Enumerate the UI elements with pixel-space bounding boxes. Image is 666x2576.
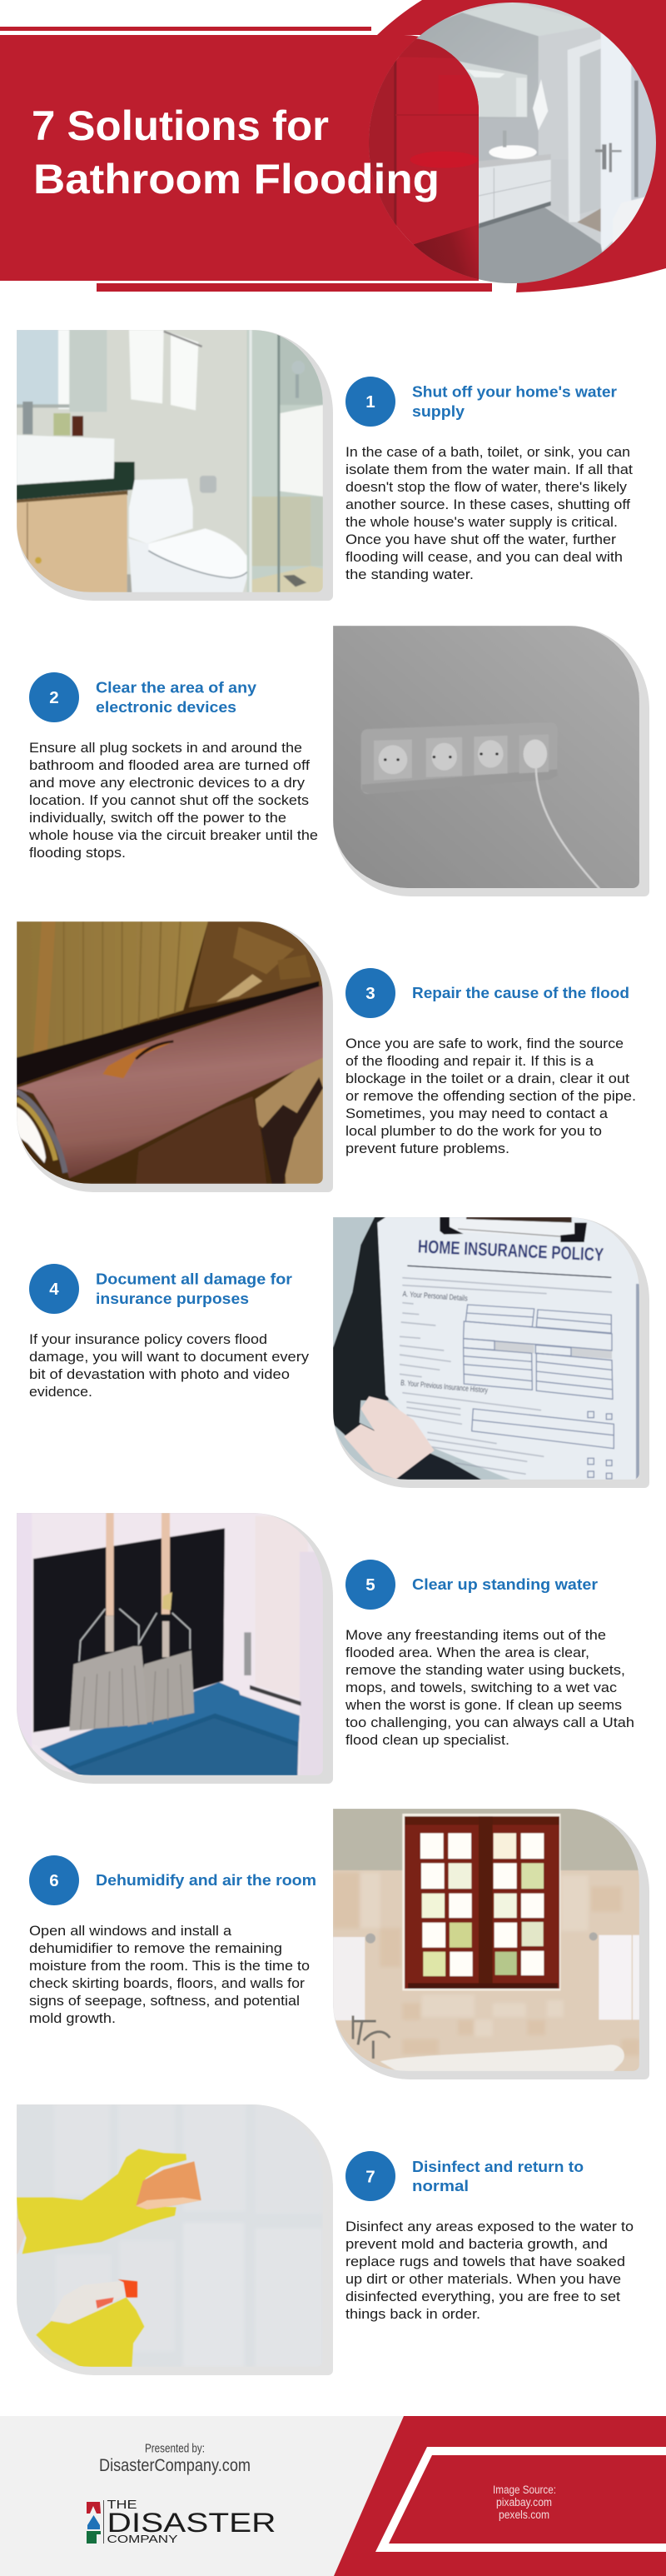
body text	[345, 445, 633, 582]
logo: COMPANY	[107, 2534, 178, 2545]
body text: mops, and towels, switching to a wet vac	[345, 1680, 617, 1695]
heading: electronic devices	[96, 698, 236, 716]
heading	[412, 2158, 584, 2194]
image source: pixabay.com	[496, 2496, 552, 2509]
photo: home insurance policy form: HOME INSURANCE POLICY	[417, 1236, 604, 1265]
body text: disinfected everything, you are free to set	[345, 2289, 620, 2304]
body text: If your insurance policy covers flood	[29, 1332, 267, 1347]
body text: check skirting boards, floors, and walls for	[29, 1976, 306, 1991]
number badge: 4	[49, 1280, 59, 1299]
logo	[87, 2498, 276, 2545]
photo backing	[17, 921, 333, 1192]
red tinted left side of the photo	[369, 38, 479, 280]
body text: remove the standing water using buckets,	[345, 1663, 625, 1678]
heading: Shut off your home's water	[412, 383, 617, 400]
body text: flood clean up specialist.	[345, 1733, 509, 1748]
presented by: DisasterCompany.com	[99, 2456, 251, 2475]
body text: isolate them from the water main. If all that	[345, 462, 633, 477]
heading: Document all damage for	[96, 1270, 292, 1288]
presented by: Presented by:	[145, 2441, 205, 2456]
body text: when the worst is gone. If clean up seems	[345, 1698, 622, 1713]
photo: home insurance policy form	[333, 1217, 639, 1480]
heading: Clear the area of any	[96, 678, 257, 696]
number badge	[29, 1855, 79, 1905]
title: Bathroom Flooding	[33, 156, 440, 202]
hero photo: bathroom	[358, 0, 666, 289]
body text: too challenging, you can always call a Utah	[345, 1715, 634, 1730]
heading: normal	[412, 2177, 469, 2194]
icon: flame	[87, 2502, 101, 2514]
red backdrop shape	[377, 0, 666, 292]
photo: bathroom with toilet and sink	[17, 330, 323, 592]
body text: of the flooding and repair it. If this is a	[345, 1054, 594, 1069]
bottom stripe	[97, 283, 492, 292]
photo: home insurance policy form: B. Your Previous Insurance History	[400, 1379, 489, 1395]
body text: prevent future problems.	[345, 1141, 509, 1156]
heading: Repair the cause of the flood	[412, 984, 629, 1001]
photo: damaged copper pipe	[17, 921, 323, 1184]
body text: blockage in the toilet or a drain, clear it out	[345, 1071, 629, 1086]
body text	[345, 1036, 636, 1156]
body text: Disinfect any areas exposed to the water to	[345, 2219, 634, 2234]
photo: home insurance policy form: A. Your Personal Details	[402, 1290, 468, 1302]
body text: or remove the offending section of the pipe.	[345, 1089, 636, 1104]
number badge	[345, 2151, 395, 2201]
number badge	[345, 377, 395, 427]
section 1: shut off water	[17, 330, 633, 601]
heading	[412, 383, 617, 420]
number badge: 6	[49, 1871, 59, 1890]
number badge	[29, 672, 79, 722]
body text: individually, switch off the power to the	[29, 811, 286, 826]
number badge: 5	[365, 1575, 375, 1595]
image source	[493, 2484, 556, 2521]
body text: Move any freestanding items out of the	[345, 1628, 606, 1643]
red corner panel	[334, 2416, 666, 2576]
body text: signs of seepage, softness, and potential	[29, 1994, 300, 2009]
body text: another source. In these cases, shutting off	[345, 497, 630, 512]
number badge	[345, 1560, 395, 1610]
number badge: 3	[365, 984, 375, 1003]
body text	[29, 1924, 310, 2026]
heading: insurance purposes	[96, 1290, 249, 1307]
number badge: 7	[365, 2168, 375, 2186]
body text: bathroom and flooded area are turned off	[29, 758, 310, 773]
body text: Once you are safe to work, find the source	[345, 1036, 624, 1051]
body text: prevent mold and bacteria growth, and	[345, 2237, 608, 2252]
photo backing	[17, 1513, 333, 1784]
body text	[29, 1332, 310, 1400]
inner red panel	[389, 2455, 666, 2544]
photo: wall sockets	[333, 626, 639, 890]
photo: mops in a corner	[17, 1513, 323, 1775]
top stripe	[0, 27, 371, 31]
section 6: dehumidify	[29, 1809, 649, 2079]
body text: bit of devastation with photo and video	[29, 1367, 290, 1382]
body text	[345, 2219, 634, 2322]
body text: mold growth.	[29, 2011, 116, 2026]
heading: Clear up standing water	[412, 1575, 598, 1593]
photo backing	[17, 330, 333, 601]
body text	[345, 1628, 634, 1748]
body text: and move any electronic devices to a dry	[29, 776, 306, 791]
body text: evidence.	[29, 1385, 92, 1400]
footer	[0, 2416, 666, 2576]
heading	[96, 1270, 292, 1307]
heading: Dehumidify and air the room	[96, 1871, 316, 1889]
title: 7 Solutions for	[32, 102, 329, 149]
section 3: repair cause	[17, 921, 636, 1192]
header	[0, 0, 666, 292]
photo backing	[17, 2104, 333, 2375]
icon: water drop	[87, 2515, 100, 2529]
body text: location. If you cannot shut off the sockets	[29, 793, 309, 808]
body text: flooding will cease, and you can deal with	[345, 550, 623, 565]
body text: Once you have shut off the water, further	[345, 532, 617, 547]
section 5: standing water	[17, 1513, 634, 1784]
photo: bathroom window and tub	[333, 1809, 639, 2071]
heading	[96, 678, 257, 716]
image source: Image Source:	[493, 2484, 556, 2496]
body text: the standing water.	[345, 567, 474, 582]
photo backing	[333, 1809, 649, 2079]
photo: gloved hands cleaning tiles	[17, 2148, 201, 2367]
number badge: 2	[49, 688, 59, 707]
body text: Sometimes, you may need to contact a	[345, 1106, 609, 1121]
number badge	[345, 968, 395, 1018]
body text: replace rugs and towels that have soaked	[345, 2254, 625, 2269]
logo: THE	[107, 2498, 137, 2512]
body text: Open all windows and install a	[29, 1924, 232, 1939]
footer background	[0, 2416, 666, 2576]
section 7: disinfect	[17, 2104, 634, 2375]
body text: the whole house's water supply is critical.	[345, 515, 618, 530]
body text: damage, you will want to document every	[29, 1350, 310, 1365]
body text: Ensure all plug sockets in and around the	[29, 741, 302, 756]
body text: In the case of a bath, toilet, or sink, you can	[345, 445, 630, 460]
presented by	[99, 2441, 251, 2475]
photo backing	[333, 1217, 649, 1488]
body text: flooding stops.	[29, 846, 126, 861]
body text: flooded area. When the area is clear,	[345, 1645, 589, 1660]
image source: pexels.com	[499, 2509, 549, 2521]
title	[32, 102, 440, 202]
body text: up dirt or other materials. When you have	[345, 2272, 621, 2287]
body text: moisture from the room. This is the time to	[29, 1959, 310, 1974]
section 2: clear electronics	[28, 626, 649, 896]
red title band	[0, 35, 479, 281]
number badge: 1	[365, 392, 375, 412]
logo: DISASTER	[107, 2508, 276, 2538]
photo backing	[333, 626, 649, 896]
heading: supply	[412, 402, 465, 420]
heading: Disinfect and return to	[412, 2158, 584, 2175]
body text: dehumidifier to remove the remaining	[29, 1941, 282, 1956]
body text: local plumber to do the work for you to	[345, 1124, 602, 1139]
body text: doesn't stop the flow of water, there's likely	[345, 480, 628, 495]
body text	[28, 741, 318, 861]
section 4: document damage	[29, 1217, 649, 1488]
white frame	[375, 2447, 666, 2552]
body text: whole house via the circuit breaker until the	[28, 828, 318, 843]
number badge	[29, 1264, 79, 1314]
body text: things back in order.	[345, 2307, 480, 2322]
icon: green mark	[87, 2531, 101, 2544]
